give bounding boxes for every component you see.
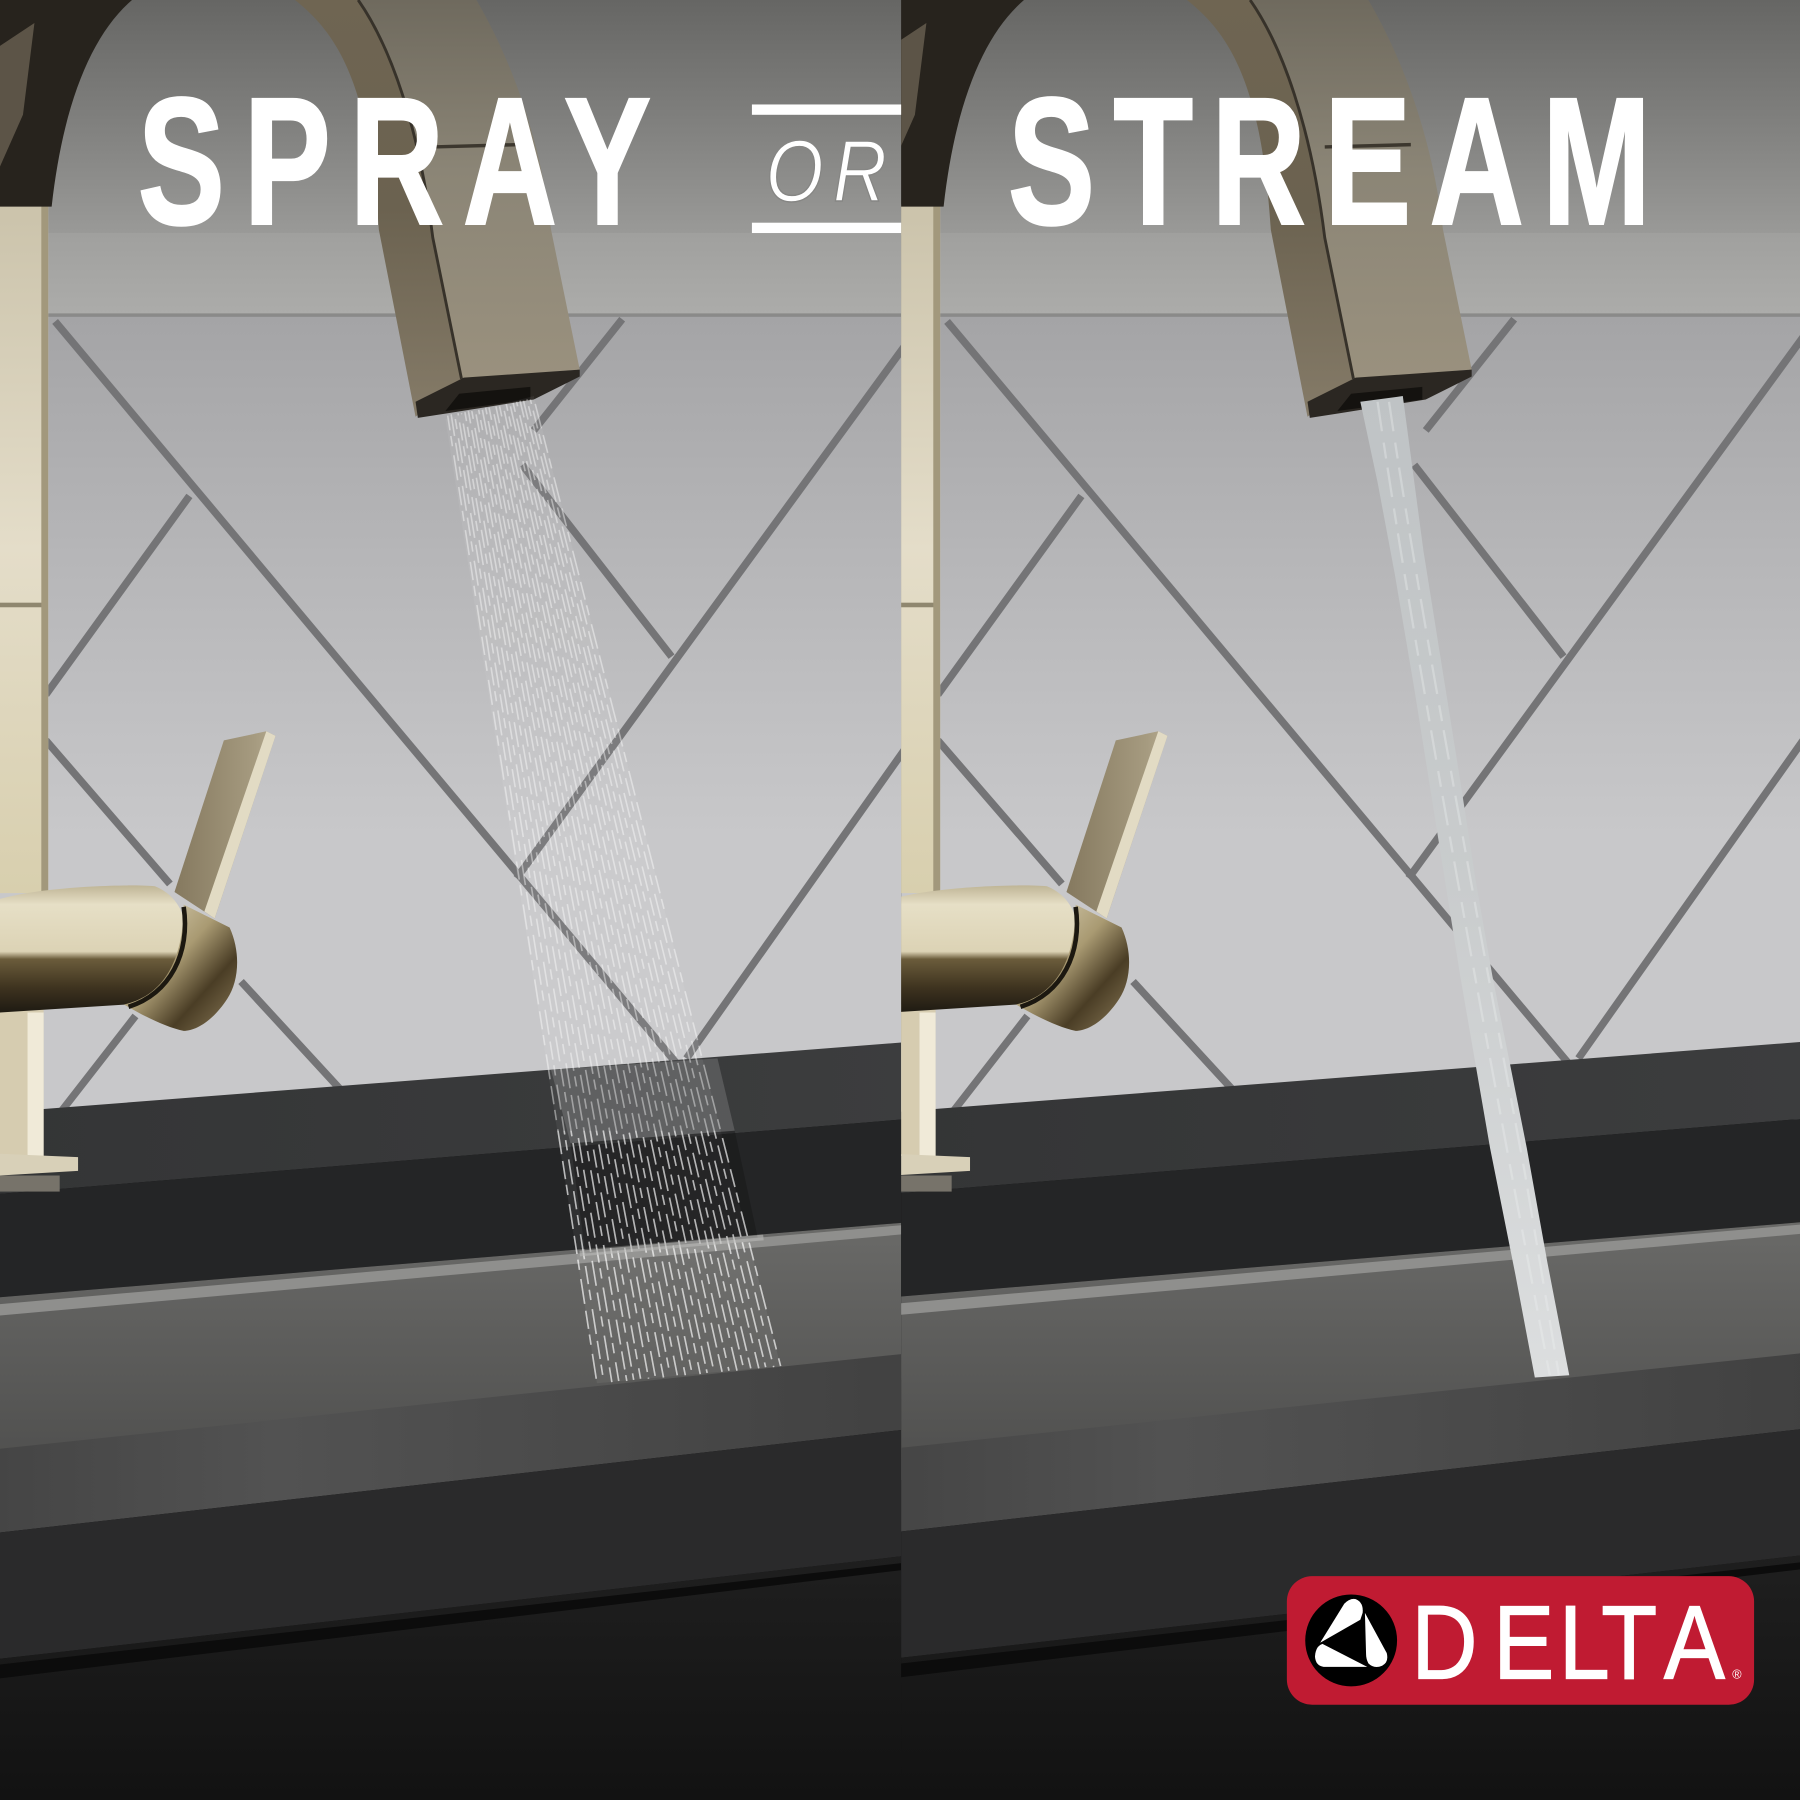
near countertop front face xyxy=(0,1428,918,1659)
tile grout lines xyxy=(46,319,918,1119)
near countertop surface xyxy=(0,1352,918,1533)
cabinet front xyxy=(0,1556,1800,1668)
spray water streaks xyxy=(448,398,781,1383)
solid water stream xyxy=(1360,396,1569,1378)
registered mark: ® xyxy=(1732,1667,1742,1681)
faucet end cap xyxy=(124,905,237,1031)
back countertop surface xyxy=(0,1041,918,1194)
upper wall xyxy=(0,0,918,235)
heading: SPRAY: SPRAY xyxy=(138,61,651,263)
panel: spray photo xyxy=(0,0,918,1800)
faucet spout xyxy=(295,0,580,418)
lower spray droplets xyxy=(557,1130,782,1382)
faucet lever handle xyxy=(174,731,276,918)
faucet base stem xyxy=(0,1004,78,1192)
stream texture xyxy=(1376,402,1536,1240)
logo wordmark: DELTA xyxy=(1411,1584,1725,1701)
kitchen scene repeated xyxy=(892,0,1800,1800)
faucet arch dark reflection xyxy=(0,0,132,207)
panel: stream photo xyxy=(892,0,1800,1800)
faucet body xyxy=(0,885,187,1012)
sink basin xyxy=(0,1221,918,1481)
heading: STREAM: STREAM xyxy=(1008,61,1651,263)
kitchen scene: wall, tiles, faucet and sink xyxy=(0,0,918,1800)
faucet neck xyxy=(0,204,48,893)
wall shelf band xyxy=(0,233,918,316)
OR divider xyxy=(752,104,901,233)
spray mist haze xyxy=(502,396,780,1383)
logo: Delta xyxy=(1287,1576,1754,1705)
backsplash tiles xyxy=(0,316,918,1119)
OR divider: OR xyxy=(766,123,887,220)
countertop front face xyxy=(0,1118,918,1297)
icon: Delta triangle mark xyxy=(1305,1595,1397,1686)
